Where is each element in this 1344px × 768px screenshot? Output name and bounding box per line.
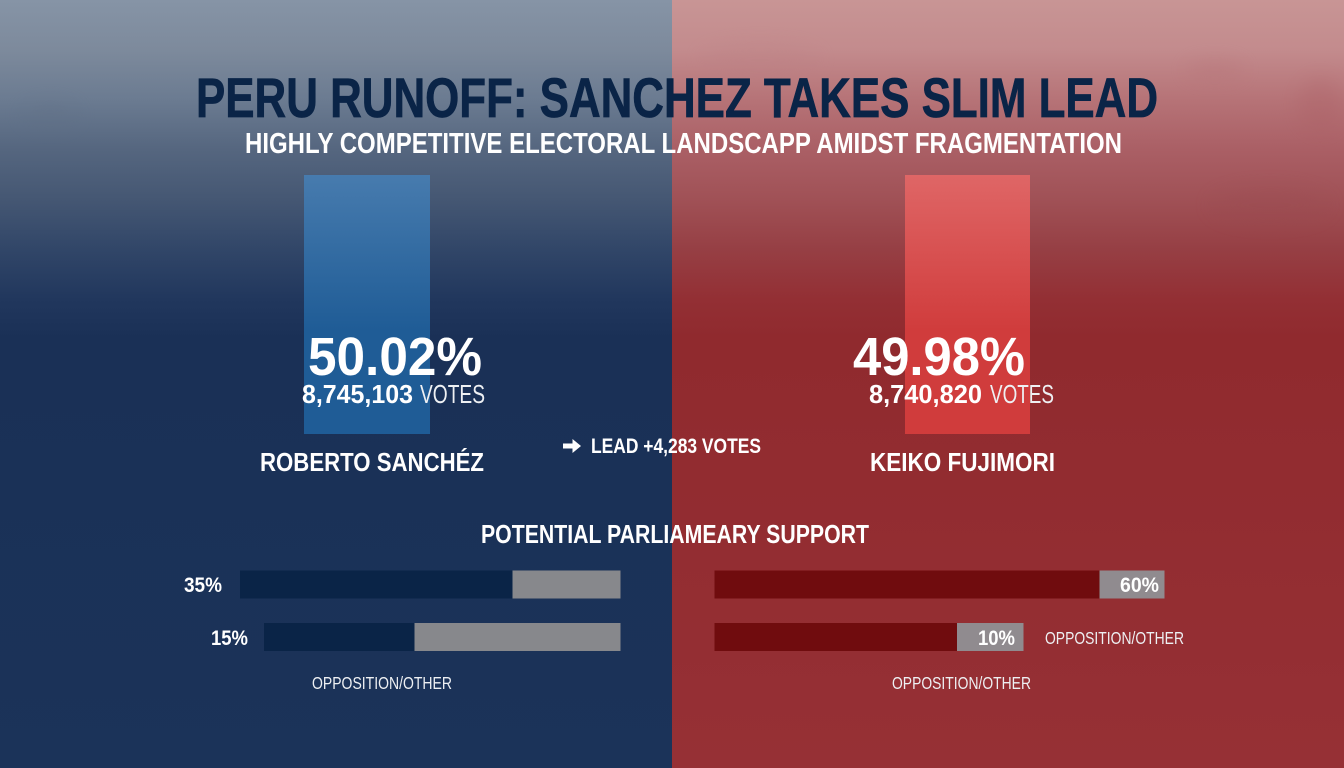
bar: Fujimori vote share [905, 175, 1030, 434]
Sanchez percentage: 50.02% [308, 327, 482, 387]
chart: Fujimori parliamentary support [714, 570, 1184, 693]
chart: Sanchez parliamentary support [184, 570, 620, 693]
bar: Sanchez vote share [304, 175, 430, 434]
Fujimori name: KEIKO FUJIMORI [870, 447, 1055, 477]
Fujimori votes: VOTES [990, 379, 1054, 409]
callout: lead margin [563, 435, 761, 458]
row: 35% [184, 570, 620, 598]
row: 15%: 15% [211, 627, 248, 650]
icon: arrow [563, 439, 581, 453]
row: 60% [714, 570, 1164, 598]
label: opposition/other below bars: OPPOSITION/OTHER [892, 673, 1031, 693]
lead text: LEAD +4,283 VOTES [591, 435, 761, 458]
heading: parliamentary support: POTENTIAL PARLIAMEARY SUPPORT [481, 519, 869, 549]
panel: Fujimori result [853, 175, 1055, 477]
Sanchez name: ROBERTO SANCHÉZ [260, 447, 484, 477]
label: opposition/other: OPPOSITION/OTHER [312, 673, 452, 693]
row: 35%: 35% [184, 574, 222, 597]
panel: left blue background [0, 0, 672, 768]
panel: right red background [672, 0, 1344, 768]
row: 60%: 60% [1120, 574, 1159, 597]
Fujimori percentage: 49.98% [853, 327, 1025, 387]
row: 15% [211, 623, 620, 651]
row: 10%: 10% [978, 627, 1015, 650]
panel: Sanchez result [260, 175, 485, 477]
Sanchez votes: 8,745,103 [302, 379, 413, 409]
Fujimori votes: 8,740,820 [869, 379, 982, 409]
row: 10% [714, 623, 1024, 651]
subtitle: HIGHLY COMPETITIVE ELECTORAL LANDSCAPP AMIDST FRAGMENTATION [245, 128, 1122, 160]
label: opposition/other beside bar: OPPOSITION/OTHER [1045, 628, 1184, 648]
Sanchez votes: VOTES [420, 379, 485, 409]
